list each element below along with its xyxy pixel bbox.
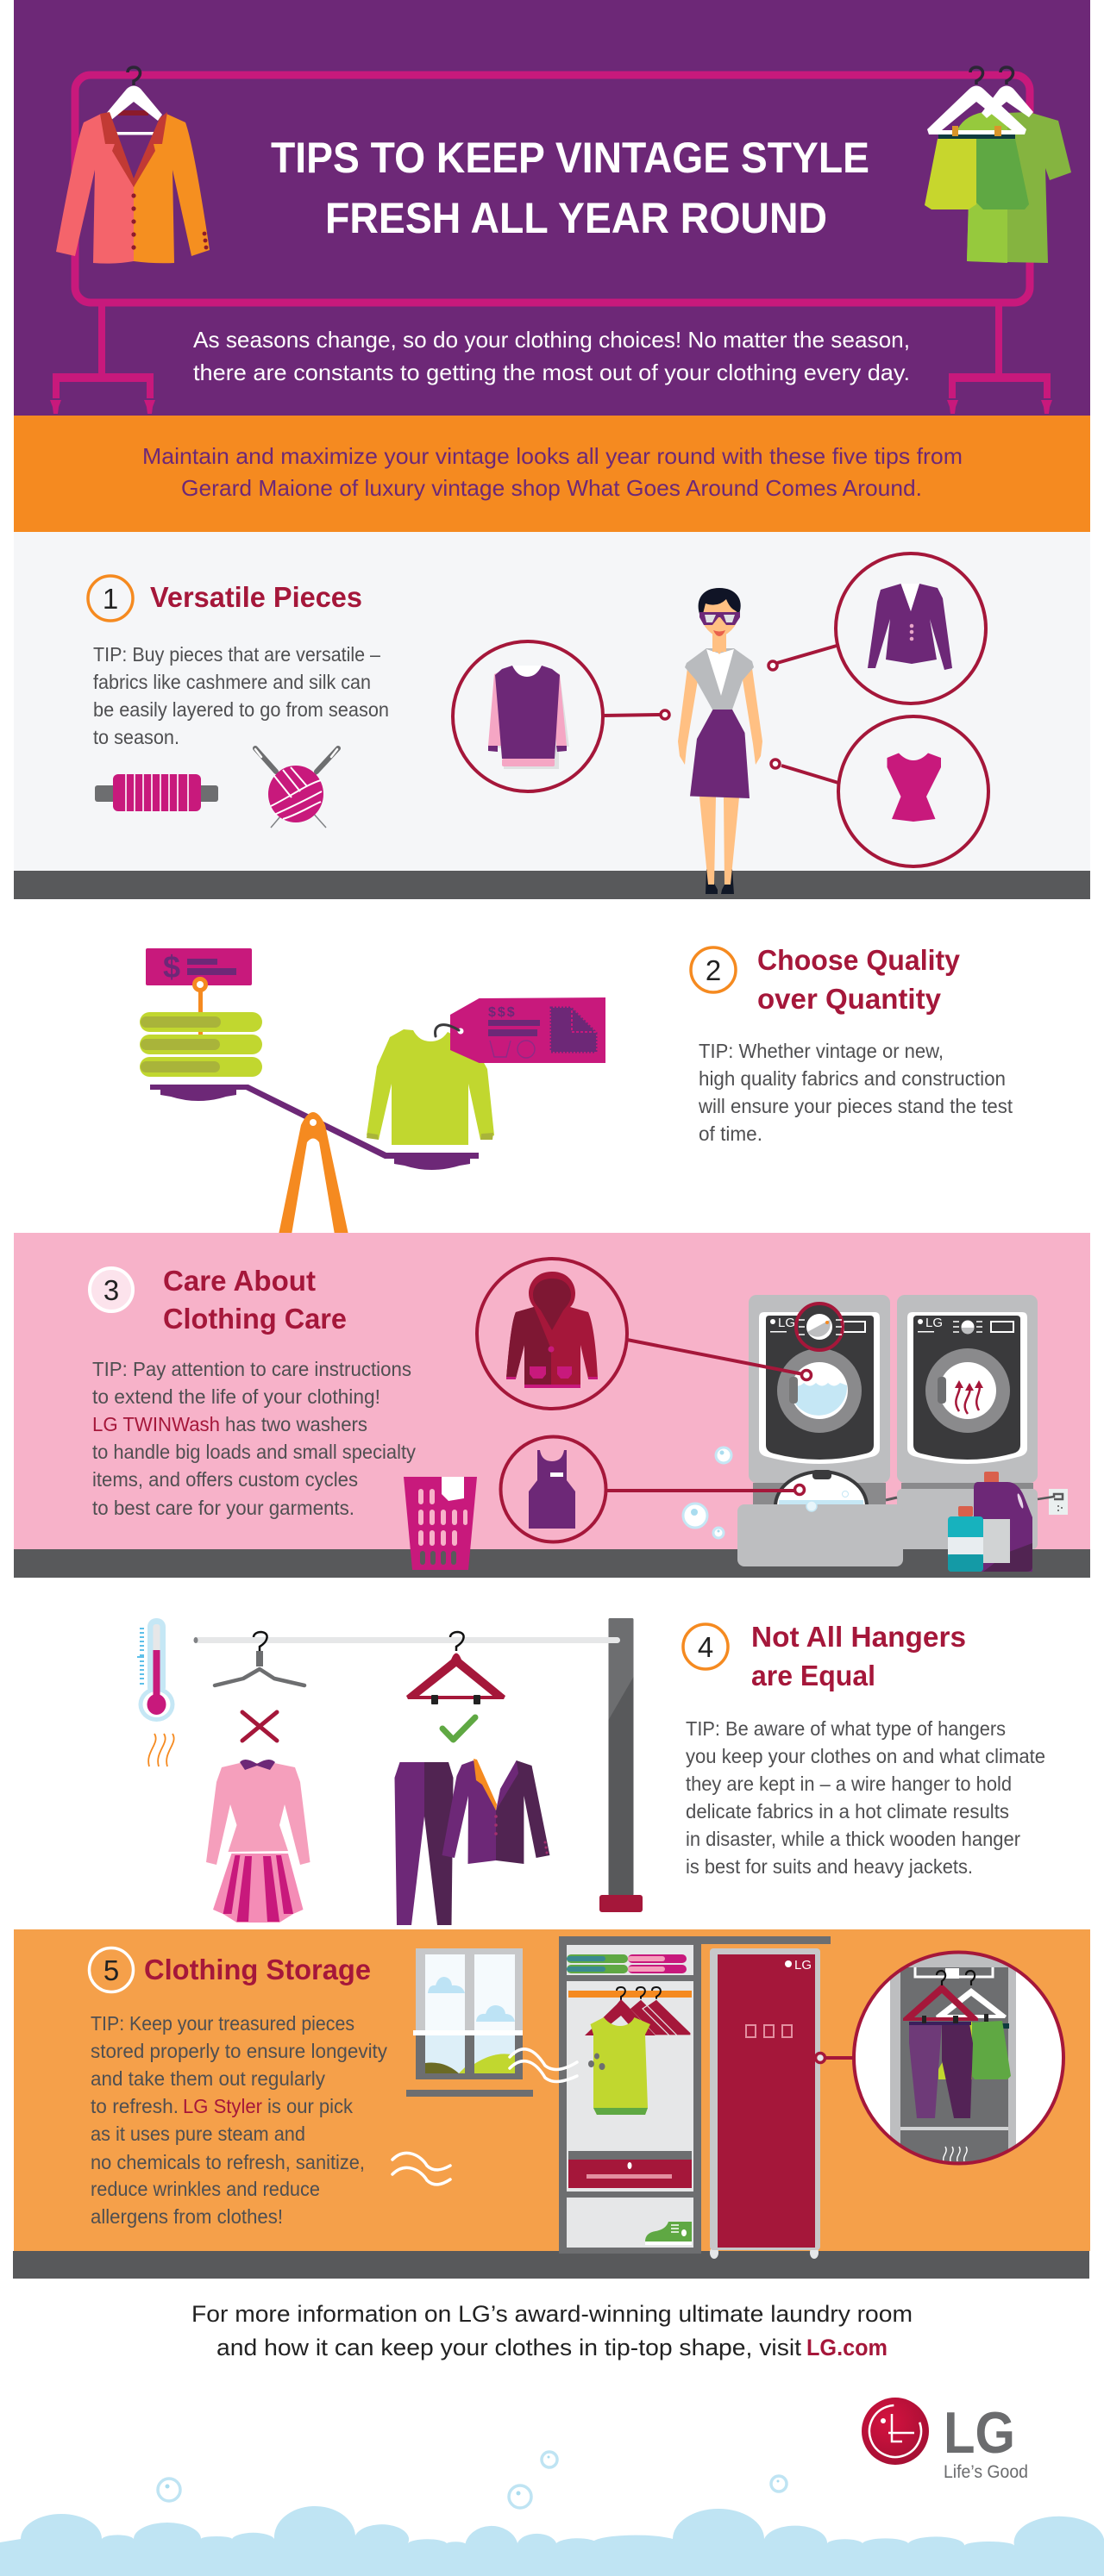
intro text: there are constants to getting the most out of your clothing every day.	[193, 360, 910, 385]
icon: wall outlet	[1038, 1489, 1068, 1515]
icon: shirt and skirt on hangers	[925, 67, 1071, 263]
tip 1 text	[93, 643, 389, 748]
number badge 2	[691, 947, 736, 992]
callout: inside of styler	[854, 1948, 1063, 2164]
tip 3 text: to handle big loads and small specialty	[92, 1441, 416, 1463]
figure: woman	[678, 588, 762, 894]
panel: orange intro band	[14, 416, 1090, 532]
closing call to action: and how it can keep your clothes in tip-top shape, visit	[216, 2335, 802, 2360]
tip 2 text: TIP: Whether vintage or new,	[699, 1040, 944, 1062]
heading: care about clothing care: Clothing Care	[163, 1303, 347, 1335]
icon: heat waves	[148, 1734, 174, 1766]
icon: LG Styler cabinet	[710, 1948, 820, 2259]
logo: LG Life's Good	[862, 2398, 1028, 2482]
icon: green check	[442, 1717, 475, 1740]
tip 4 text: they are kept in – a wire hanger to hold	[686, 1773, 1012, 1795]
icon: yarn ball and needles	[255, 748, 338, 828]
intro band text	[142, 443, 963, 501]
tip 1 text: fabrics like cashmere and silk can	[93, 671, 371, 693]
number badge 1	[88, 576, 133, 621]
clouds of foam	[0, 2506, 1104, 2576]
icon: sweater with tag: $$$	[488, 1005, 517, 1020]
tip 2 text: high quality fabrics and construction	[699, 1067, 1006, 1090]
icon: window	[406, 1948, 533, 2097]
tip 4 text: you keep your clothes on and what climate	[686, 1745, 1045, 1767]
intro text	[193, 327, 910, 385]
tip 1 text: be easily layered to go from season	[93, 698, 389, 721]
icon: washer left with mini washer	[737, 1295, 903, 1566]
heading: not all hangers are equal: Not All Hangers	[751, 1621, 966, 1653]
tip 4 text	[686, 1717, 1045, 1878]
panel: tip 4 hangers	[137, 1618, 1045, 1925]
panel: tip 1 versatile pieces	[14, 532, 1090, 899]
tip 5 text: LG Styler	[183, 2095, 262, 2117]
icon: sweater with tag	[367, 997, 605, 1145]
callout: top	[838, 716, 988, 866]
heading: choose quality over quantity: over Quantity	[757, 983, 942, 1015]
title	[271, 134, 869, 242]
tip 3 text: has two washers	[225, 1413, 367, 1435]
tip 5 text: as it uses pure steam and	[91, 2123, 305, 2145]
icon: washer right: LG	[925, 1316, 943, 1330]
tip 4 text: delicate fabrics in a hot climate results	[686, 1800, 1009, 1823]
panel: tip 2 quality over quantity	[140, 944, 1013, 1235]
icon: floating bubbles	[158, 2452, 787, 2508]
connector: sweater	[603, 710, 669, 719]
panel: tip 5 clothing storage	[13, 1929, 1090, 2279]
tip 4 text: in disaster, while a thick wooden hanger	[686, 1828, 1020, 1850]
tip 3 text: items, and offers custom cycles	[92, 1468, 358, 1491]
number badge 3	[90, 1268, 133, 1311]
tip 5 text: and take them out regularly	[91, 2067, 325, 2090]
tip 1 text: TIP: Buy pieces that are versatile –	[93, 643, 380, 666]
icon: laundry basket	[404, 1477, 477, 1570]
heading: care about clothing care	[163, 1265, 347, 1335]
number badge 4: 4	[698, 1631, 713, 1663]
tip 2 text: of time.	[699, 1122, 762, 1145]
heading: choose quality over quantity: Choose Quality	[757, 944, 961, 976]
icon: detergent bottles	[948, 1472, 1032, 1572]
icon: thread spool	[95, 774, 218, 811]
tip 5 text: to refresh.	[91, 2095, 179, 2117]
icon: price tag with dollar sign	[146, 948, 252, 1016]
connector: jacket	[768, 646, 837, 670]
heading: not all hangers are equal: are Equal	[751, 1660, 875, 1691]
tip 3 text: to best care for your garments.	[92, 1497, 354, 1519]
tip 5 text	[91, 2012, 387, 2228]
icon: blazer on hanger	[56, 67, 210, 264]
number badge 5	[90, 1948, 133, 1991]
closing call to action: LG.com	[806, 2335, 888, 2360]
tip 2 text	[698, 1040, 1013, 1145]
icon: wardrobe with shelves	[559, 1936, 831, 2254]
callout: apron garment	[500, 1436, 605, 1541]
icon: clothing rack	[50, 75, 1052, 414]
title: TIPS TO KEEP VINTAGE STYLE	[271, 134, 869, 182]
intro band text: Maintain and maximize your vintage looks all year round with these five tips from	[142, 443, 963, 469]
panel: header	[14, 0, 1090, 416]
closing call to action: For more information on LG’s award-winning ultimate laundry room	[191, 2301, 913, 2327]
callout: sweater	[453, 641, 603, 791]
intro text: As seasons change, so do your clothing choices! No matter the season,	[193, 327, 910, 353]
connector: hoodie to washer	[627, 1340, 811, 1379]
tip 4 text: TIP: Be aware of what type of hangers	[686, 1717, 1006, 1740]
icon: seesaw scale	[150, 1085, 479, 1235]
callout: jacket	[836, 553, 986, 703]
number badge 1: 1	[103, 583, 118, 615]
icon: steam waves near text	[392, 2153, 450, 2185]
number badge 5: 5	[104, 1954, 119, 1986]
number badge 4	[683, 1624, 728, 1669]
number badge 3: 3	[104, 1274, 119, 1306]
icon: washer left with mini washer: LG	[778, 1316, 795, 1330]
icon: steam waves near window	[510, 2049, 577, 2081]
connector: styler callout	[816, 2054, 854, 2062]
heading: choose quality over quantity	[757, 944, 961, 1015]
callout: hoodie	[477, 1259, 627, 1409]
panel: tip 3 clothing care	[14, 1233, 1090, 1578]
title: FRESH ALL YEAR ROUND	[325, 194, 827, 242]
heading: not all hangers are equal	[751, 1621, 966, 1691]
heading: care about clothing care: Care About	[163, 1265, 316, 1297]
connector: apron to mini washer	[605, 1485, 804, 1495]
icon: washer right	[897, 1295, 1038, 1549]
icon: price tag with dollar sign: $	[163, 949, 180, 985]
icon: LG Styler cabinet: LG	[794, 1958, 812, 1973]
tip 5 text: stored properly to ensure longevity	[91, 2040, 387, 2062]
icon: stacked folded clothes	[140, 1012, 262, 1077]
icon: wire hanger	[215, 1632, 304, 1685]
tip 2 text: will ensure your pieces stand the test	[698, 1095, 1013, 1117]
connector: top	[771, 760, 838, 783]
tip 5 text: no chemicals to refresh, sanitize,	[91, 2151, 365, 2173]
icon: red cross	[242, 1712, 277, 1741]
icon: wooden hanger	[406, 1632, 505, 1704]
logo: LG Life's Good: LG	[944, 2400, 1015, 2466]
number badge 2: 2	[706, 954, 721, 986]
tip 5 text: allergens from clothes!	[91, 2205, 283, 2228]
tip 3 text: LG TWINWash	[92, 1413, 220, 1435]
tip 5 text: reduce wrinkles and reduce	[91, 2178, 320, 2200]
intro band text: Gerard Maione of luxury vintage shop What Goes Around Comes Around.	[181, 475, 922, 501]
tip 5 text: is our pick	[267, 2095, 353, 2117]
closing call to action	[191, 2301, 913, 2360]
tip 3 text: to extend the life of your clothing!	[92, 1385, 380, 1408]
heading: clothing storage: Clothing Storage	[144, 1954, 371, 1985]
icon: dress	[206, 1760, 310, 1923]
icon: soap bubbles	[683, 1447, 731, 1538]
tip 1 text: to season.	[93, 726, 179, 748]
tip 5 text: TIP: Keep your treasured pieces	[91, 2012, 354, 2035]
post with base	[599, 1618, 643, 1912]
tip 3 text: TIP: Pay attention to care instructions	[92, 1358, 411, 1380]
logo: LG Life's Good: Life’s Good	[944, 2462, 1028, 2482]
icon: suit trousers and jacket	[395, 1759, 549, 1925]
clothes rail	[193, 1637, 620, 1643]
tip 4 text: is best for suits and heavy jackets.	[686, 1855, 973, 1878]
heading: versatile pieces: Versatile Pieces	[150, 581, 362, 613]
icon: thermometer	[137, 1618, 174, 1722]
tip 3 text	[92, 1358, 416, 1519]
